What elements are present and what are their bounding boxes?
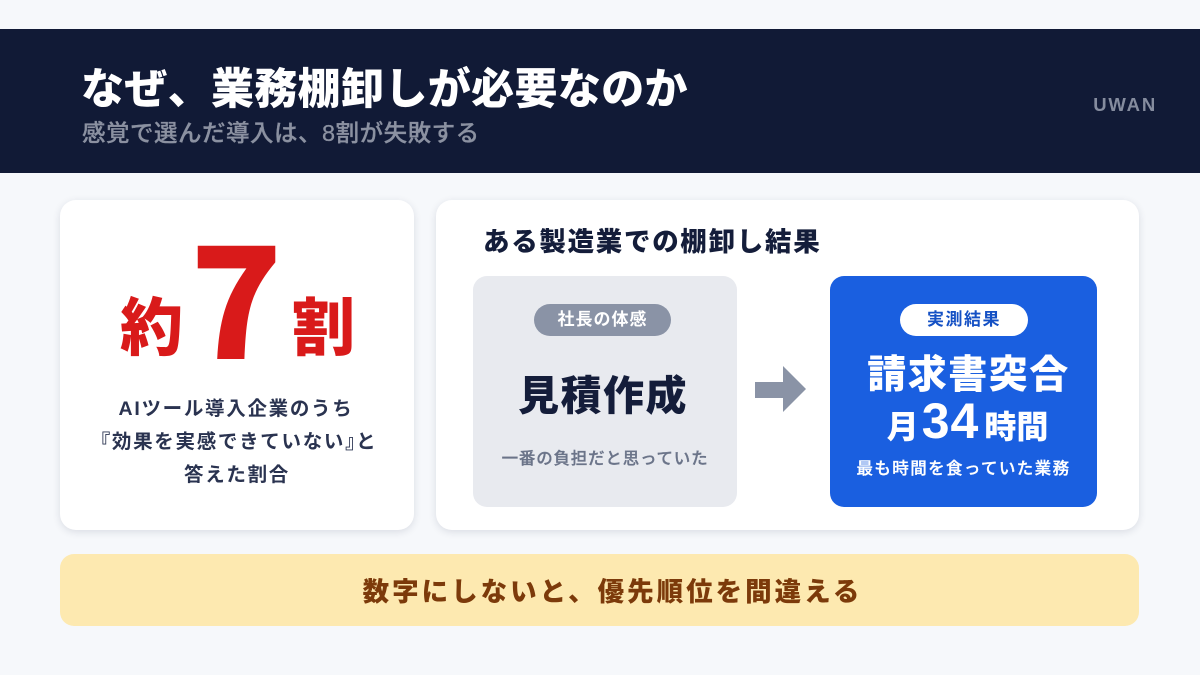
measured note: 最も時間を食っていた業務 bbox=[856, 460, 1070, 478]
conclusion text: 数字にしないと、優先順位を間違える bbox=[363, 577, 862, 607]
panel heading: ある製造業での棚卸し結果 bbox=[483, 227, 821, 257]
pill label bbox=[534, 304, 671, 336]
box: measured result bbox=[830, 276, 1097, 507]
title: なぜ、業務棚卸しが必要なのか bbox=[81, 66, 688, 114]
panel: inventory result bbox=[436, 200, 1139, 530]
digit seven: 7 bbox=[190, 183, 283, 403]
statistic description: AIツール導入企業のうち bbox=[119, 398, 353, 420]
brand name: UWAN bbox=[1093, 94, 1157, 115]
perceived note: 一番の負担だと思っていた bbox=[502, 450, 708, 468]
suffix kanji: 割 bbox=[292, 294, 355, 364]
measured task: 請求書突合 bbox=[867, 354, 1070, 397]
pill label: 社長の体感 bbox=[558, 310, 648, 329]
statistic description: 『効果を実感できていない』と bbox=[91, 431, 377, 453]
prefix kanji: 約 bbox=[120, 294, 183, 364]
pill label: 実測結果 bbox=[927, 310, 1001, 329]
perceived task: 見積作成 bbox=[518, 373, 688, 419]
measured hours: 月34時間 bbox=[887, 393, 1048, 449]
header band bbox=[0, 29, 1200, 173]
box: president's perception bbox=[473, 276, 737, 507]
arrow bbox=[755, 366, 806, 412]
conclusion banner bbox=[60, 554, 1139, 626]
big number: about 70 percent bbox=[120, 183, 355, 403]
pill label bbox=[900, 304, 1028, 336]
subtitle: 感覚で選んだ導入は、8割が失敗する bbox=[82, 120, 480, 146]
statistic description bbox=[91, 398, 377, 486]
statistic description: 答えた割合 bbox=[184, 464, 290, 486]
panel: statistic bbox=[60, 200, 414, 530]
